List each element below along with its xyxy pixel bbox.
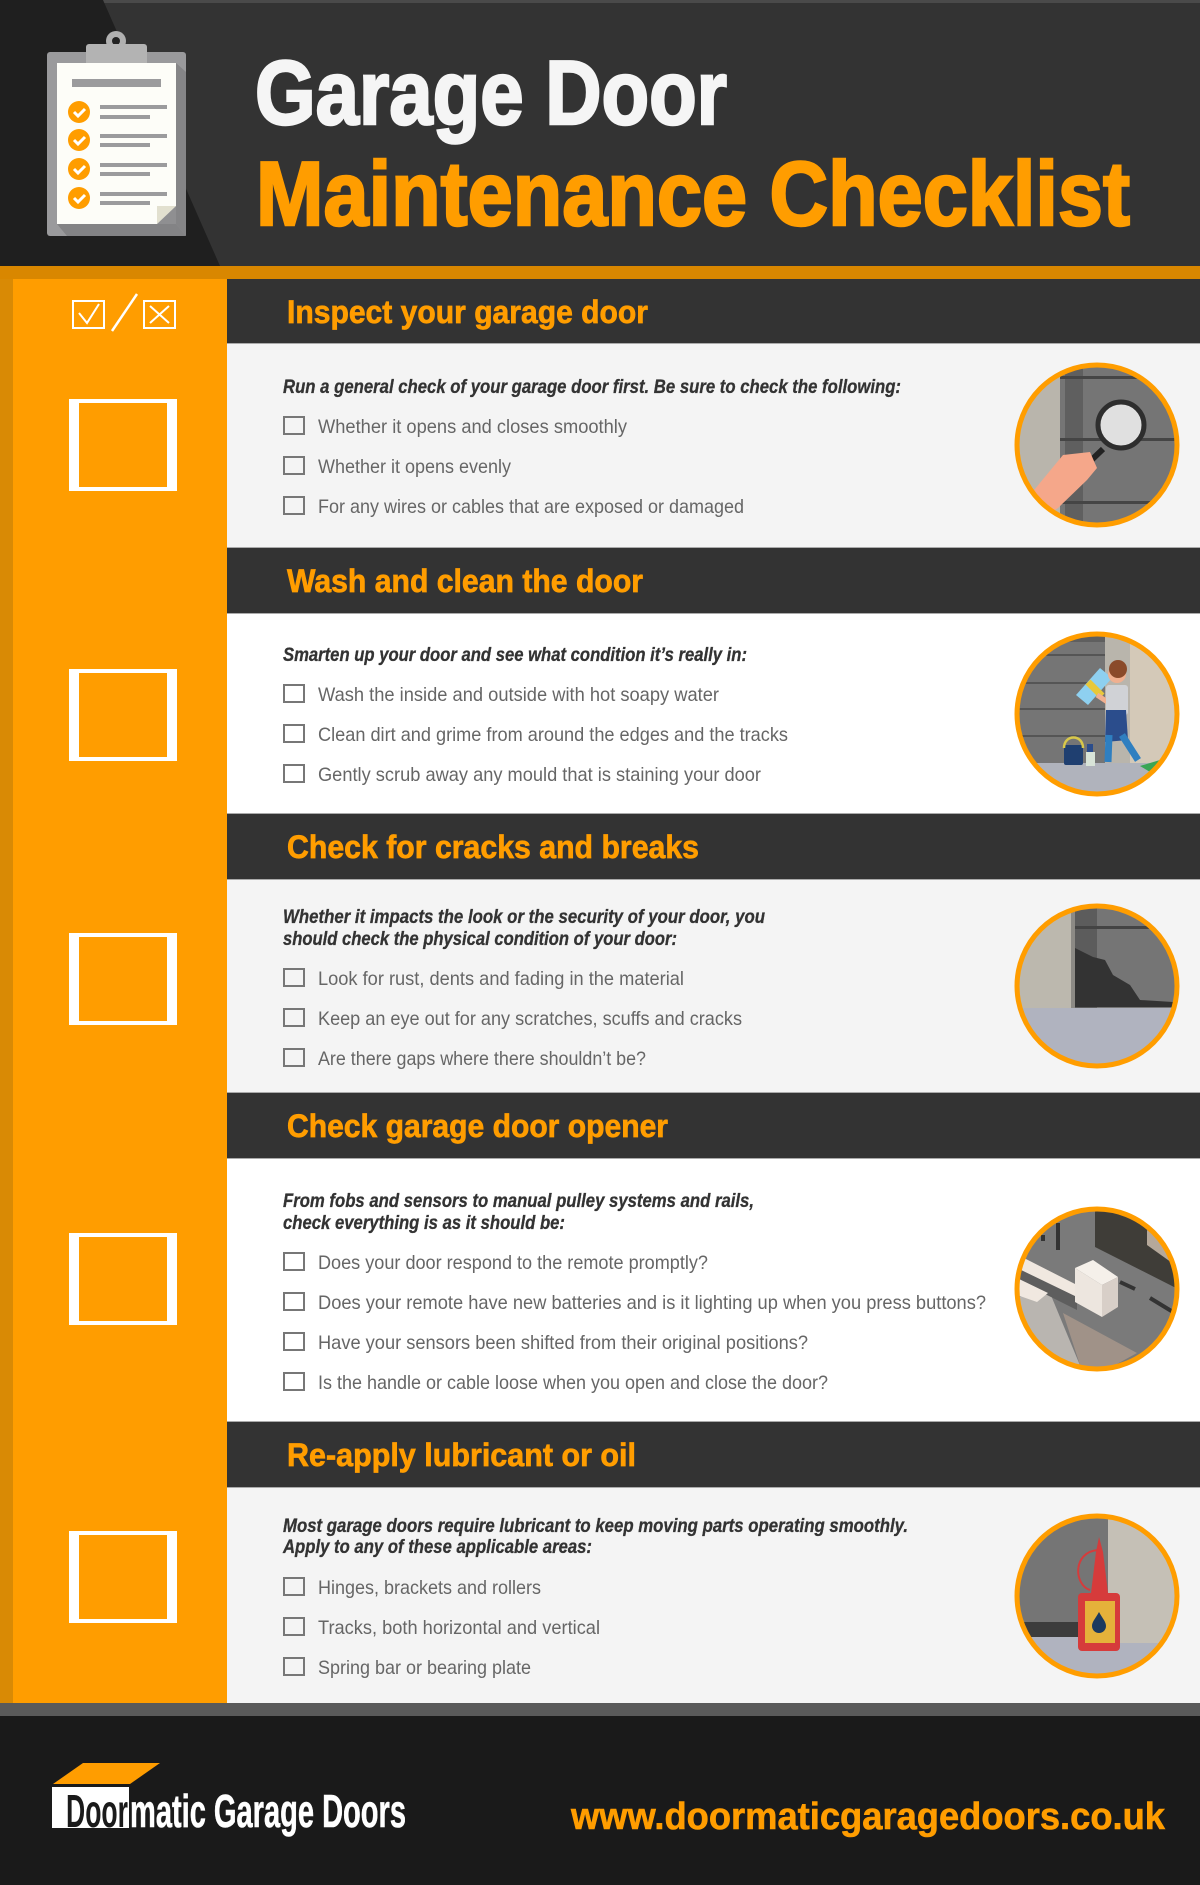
panel: check for cracks and breaks: [227, 814, 1200, 1093]
intro text: cracks: should check the physical condition of your door:: [283, 929, 677, 950]
intro text: opener: From fobs and sensors to manual pulley systems and rails,: [283, 1191, 754, 1212]
checklist: inspect: [284, 416, 744, 518]
title: Garage Door: [255, 43, 727, 144]
heading: lubricant: Re-apply lubricant or oil: [287, 1437, 636, 1473]
intro text: lubricant: Apply to any of these applicable areas:: [282, 1537, 592, 1558]
checklist: cracks: Are there gaps where there shouldn’t be?: [318, 1048, 646, 1070]
checklist: wash: [284, 684, 788, 786]
checklist: opener: Is the handle or cable loose when you open and close the door?: [318, 1372, 828, 1394]
footer: [0, 1703, 1200, 1885]
checklist: opener: Does your door respond to the remote promptly?: [318, 1252, 708, 1274]
icon: magnifying glass over door: [1015, 363, 1179, 527]
logo: Doormatic Garage Doors: matic Garage Doors: [130, 1785, 406, 1837]
intro text: lubricant: Most garage doors require lubricant to keep moving parts operating smoothly.: [283, 1516, 908, 1537]
checklist: wash: Gently scrub away any mould that is staining your door: [318, 764, 761, 786]
checklist: opener: Have your sensors been shifted from their original positions?: [318, 1332, 808, 1354]
panel: check garage door opener: [227, 1093, 1200, 1422]
icon: door opener unit: [1015, 1207, 1180, 1375]
logo: Doormatic Garage Doors: Door: [66, 1785, 128, 1837]
panel: inspect your garage door: [227, 279, 1200, 548]
checklist: inspect: For any wires or cables that are exposed or damaged: [318, 496, 744, 518]
checklist: opener: Does your remote have new batteries and is it lighting up when you press buttons?: [318, 1292, 986, 1314]
checklist: cracks: [284, 968, 742, 1070]
heading: wash: Wash and clean the door: [287, 563, 643, 599]
checklist: lubricant: Tracks, both horizontal and vertical: [318, 1617, 600, 1639]
title: [255, 43, 1130, 245]
heading: inspect: Inspect your garage door: [287, 294, 648, 330]
checklist: inspect: Whether it opens evenly: [318, 456, 511, 478]
checklist: wash: Clean dirt and grime from around the edges and the tracks: [318, 724, 788, 746]
intro text: lubricant: [282, 1516, 908, 1558]
checklist: cracks: Keep an eye out for any scratches, scuffs and cracks: [318, 1008, 742, 1030]
checkbox: inspect: [69, 399, 177, 491]
icon: damaged door corner: [1015, 904, 1179, 1068]
left checkbox column: [0, 279, 227, 1703]
header banner: [0, 0, 1200, 279]
intro text: wash: Smarten up your door and see what condition it’s really in:: [283, 645, 747, 666]
icon: tick or cross legend: [73, 294, 175, 331]
logo: Doormatic Garage Doors: [52, 1763, 406, 1837]
checkbox: opener: [69, 1233, 177, 1325]
checkbox: wash: [69, 669, 177, 761]
panel: wash and clean the door: [227, 548, 1200, 814]
intro text: opener: check everything is as it should be:: [283, 1213, 565, 1234]
checklist: lubricant: [284, 1577, 600, 1679]
checklist: opener: [284, 1252, 986, 1394]
checklist: lubricant: Spring bar or bearing plate: [318, 1657, 531, 1679]
intro text: opener: [283, 1191, 754, 1234]
panel: re-apply lubricant or oil: [227, 1422, 1200, 1703]
icon: oil bottle: [1015, 1514, 1179, 1678]
website address: www.doormaticgaragedoors.co.uk: [570, 1796, 1166, 1838]
checkbox: cracks: [69, 933, 177, 1025]
intro text: cracks: Whether it impacts the look or the security of your door, you: [283, 907, 765, 928]
intro text: inspect: Run a general check of your garage door first. Be sure to check the following:: [283, 377, 901, 398]
checklist: wash: Wash the inside and outside with hot soapy water: [318, 684, 719, 706]
icon: clipboard: [47, 31, 186, 236]
checkbox: lubricant: [69, 1531, 177, 1623]
checklist: lubricant: Hinges, brackets and rollers: [318, 1577, 541, 1599]
checklist: inspect: Whether it opens and closes smoothly: [318, 416, 627, 438]
intro text: cracks: [283, 907, 765, 950]
checklist: cracks: Look for rust, dents and fading in the material: [318, 968, 684, 990]
heading: cracks: Check for cracks and breaks: [287, 829, 699, 865]
heading: opener: Check garage door opener: [287, 1108, 668, 1144]
icon: person cleaning door: [1015, 632, 1179, 798]
